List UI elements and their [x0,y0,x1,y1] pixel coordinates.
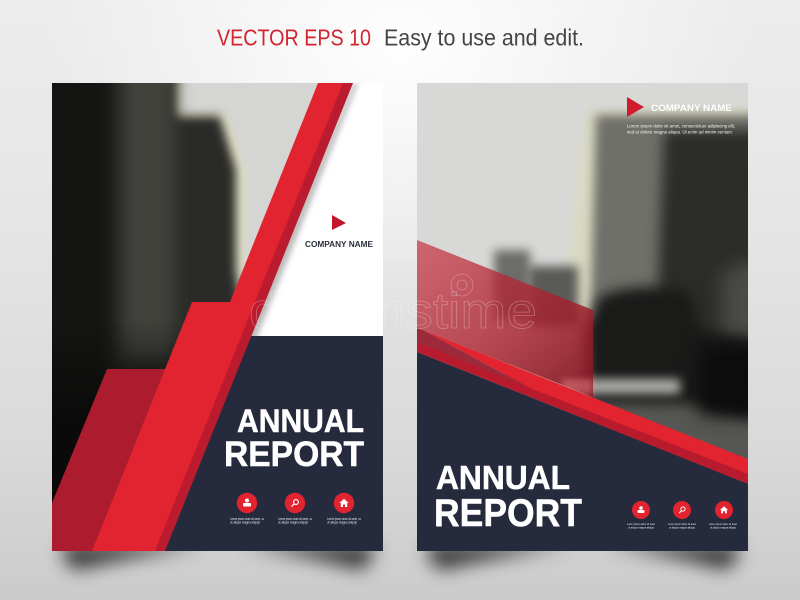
icon captions: ut aliqua magna aliquip [327,520,357,524]
icon captions: ut aliqua magna aliquip [669,526,695,530]
left cover: company name: COMPANY NAME [305,239,373,249]
left cover: dark red block [52,369,175,551]
right cover: light reflection [562,379,593,394]
right cover: intro text [627,124,735,134]
icon captions [230,517,361,524]
icon: person [632,501,650,519]
icon captions: ut aliqua magna aliquip [628,526,654,530]
right cover: annual report title: REPORT [434,492,582,535]
icon: search [285,493,305,513]
watermark: dreamstime [249,283,537,339]
icon captions: Lorem ipsum dolor sit amet [627,522,655,526]
right cover: logo triangle [627,97,644,117]
right cover: annual report title [434,459,582,535]
left cover: white panel with shadow [252,83,383,336]
right cover: navy panel [417,352,748,551]
icon captions: ut aliqua magna aliquip [278,520,308,524]
icon: person [237,493,257,513]
right cover: bright red ribbon [425,331,748,474]
left cover: dark red ribbon edge [150,83,353,551]
left cover: logo triangle [332,215,346,230]
right cover: blurred city photo [417,83,748,484]
icon captions: ut aliqua magna aliquip [710,526,736,530]
headline [217,24,584,50]
icon captions: ut aliqua magna aliquip [230,520,260,524]
right cover: intro text: Lorem ipsum dolor sit amet, consectetuer adipiscing elit, [627,124,735,128]
left cover: bright red ribbon [92,83,343,551]
icon captions: Lorem ipsum dolor sit amet, co [327,517,361,521]
headline: VECTOR EPS 10 [217,24,371,50]
right cover: annual report title: ANNUAL [436,459,570,496]
icon: home [334,493,354,513]
icon captions [627,522,737,530]
right cover: intro text: sed at dolore magna aliqua. Ut enim ad minim veniam. [627,130,733,134]
left cover: annual report title: ANNUAL [237,403,364,439]
right cover: icon row [627,501,737,530]
right brochure cover [417,83,748,551]
right cover: translucent red panel [417,240,593,397]
right cover: shaded ribbon wedge [417,328,530,388]
left brochure cover [52,83,383,551]
icon captions: Lorem ipsum dolor sit amet, co [278,517,312,521]
left cover: annual report title: REPORT [224,435,364,474]
icon captions: Lorem ipsum dolor sit amet [709,522,737,526]
icon: search [673,501,691,519]
right cover: company name: COMPANY NAME [651,103,733,114]
icon: home [715,501,733,519]
icon captions: Lorem ipsum dolor sit amet [668,522,696,526]
page shadows [62,545,739,570]
left cover: icon row [230,493,361,524]
left cover: blurred city photo [52,83,318,503]
headline: Easy to use and edit. [384,24,584,50]
left cover: annual report title [224,403,364,474]
right cover: dark red ribbon edge [417,340,748,484]
icon captions: Lorem ipsum dolor sit amet, co [230,517,264,521]
left cover: navy panel [155,336,383,551]
